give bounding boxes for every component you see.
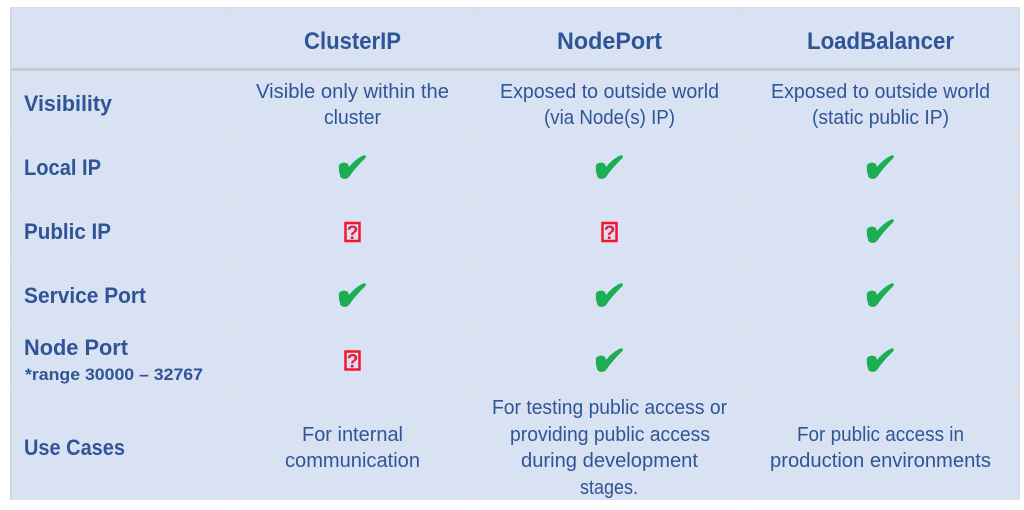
row: public IP: ? (347, 223, 358, 244)
header row: ClusterIP (304, 28, 401, 55)
row: use cases: For testing public access or (492, 397, 727, 419)
row: node port: ? (347, 352, 358, 372)
row: node port: Node Port (24, 335, 129, 360)
row: visibility: (via Node(s) IP) (544, 107, 675, 129)
row: visibility (24, 81, 990, 129)
row: local IP: Local IP (24, 155, 101, 180)
row: visibility: Visible only within the (256, 81, 449, 103)
row: visibility: Exposed to outside world (500, 81, 719, 103)
row: node port (24, 335, 894, 384)
header row (304, 28, 954, 55)
row: use cases: providing public access (510, 424, 710, 446)
row: public IP (24, 219, 894, 244)
row: public IP: Public IP (24, 219, 111, 244)
row: use cases: production environments (770, 450, 991, 472)
row: visibility: Exposed to outside world (771, 81, 990, 103)
row: node port: *range 30000 – 32767 (25, 365, 203, 384)
row: use cases: communication (285, 450, 420, 472)
header row: NodePort (557, 28, 662, 55)
row: use cases: For public access in (797, 424, 964, 446)
row: public IP: ? (604, 223, 615, 244)
row: use cases: Use Cases (24, 435, 125, 460)
row: visibility: Visibility (24, 91, 113, 116)
row: use cases (24, 397, 991, 499)
row: local IP (24, 155, 894, 180)
header row: LoadBalancer (807, 28, 954, 55)
row: use cases: For internal (302, 424, 403, 446)
row: service port: Service Port (24, 283, 147, 308)
row: service port (24, 283, 894, 308)
row: use cases: during development (521, 450, 698, 472)
row: use cases: stages. (580, 477, 638, 499)
row: visibility: cluster (324, 107, 381, 129)
row: visibility: (static public IP) (812, 107, 949, 129)
